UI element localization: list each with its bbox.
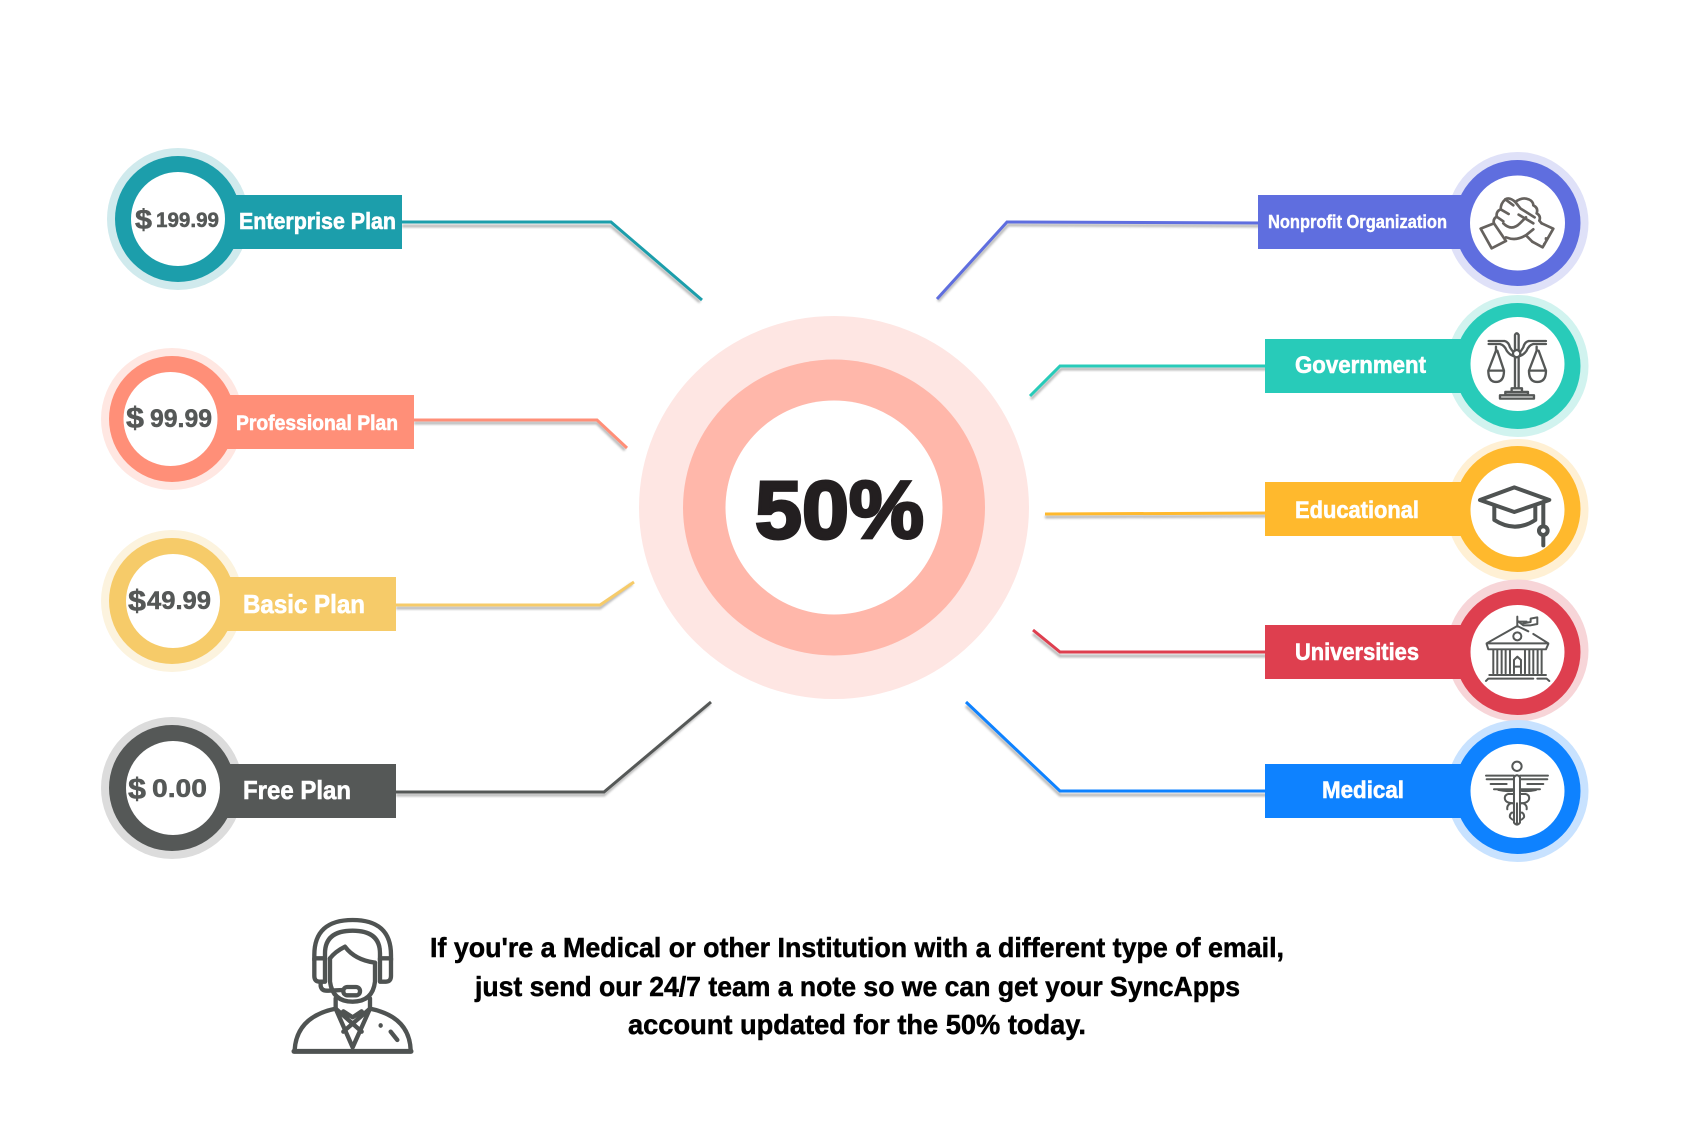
connector: Professional Plan: [414, 420, 627, 450]
label: Enterprise Plan: [239, 208, 396, 234]
panel: Nonprofit Organization: [1258, 152, 1588, 294]
price: $: [126, 402, 144, 435]
connector: Enterprise Plan: [402, 222, 702, 302]
connector: Universities: [1033, 630, 1270, 656]
panel: Universities: [1265, 580, 1588, 722]
callout text: just send our 24/7 team a note so we can get your SyncApps: [474, 971, 1240, 1002]
price: $: [128, 773, 146, 806]
label: Medical: [1322, 777, 1404, 804]
label: Educational: [1295, 497, 1419, 524]
price: [126, 402, 212, 435]
panel: Enterprise Plan: [107, 148, 402, 290]
central 50% ring: [639, 316, 1029, 699]
connector: Government: [1030, 366, 1270, 399]
price: [128, 773, 207, 806]
callout text: [430, 932, 1284, 1040]
icon: handshake: [1481, 198, 1553, 248]
label: Professional Plan: [236, 412, 398, 435]
price: 99.99: [150, 405, 212, 433]
connector: Basic Plan: [396, 582, 634, 608]
icon: graduation cap: [1480, 487, 1549, 545]
panel: Professional Plan: [101, 348, 414, 490]
price: $: [128, 585, 146, 618]
connector: Medical: [966, 702, 1270, 795]
price: 0.00: [152, 775, 207, 803]
panel: Government: [1265, 295, 1588, 437]
icon: scales of justice: [1488, 333, 1546, 399]
panel: Basic Plan: [101, 530, 396, 672]
icon: caduceus: [1486, 762, 1548, 825]
callout text: If you're a Medical or other Institution with a different type of email,: [430, 932, 1284, 963]
price: [128, 585, 211, 618]
connector: Nonprofit Organization: [937, 222, 1264, 301]
panel: Educational: [1265, 439, 1588, 581]
panel: Medical: [1265, 720, 1588, 862]
price: 199.99: [156, 209, 219, 232]
label: Basic Plan: [243, 589, 365, 619]
connector: Educational: [1045, 513, 1270, 517]
label: Universities: [1295, 639, 1419, 666]
panel: Free Plan: [101, 717, 396, 859]
icon: university building: [1486, 617, 1549, 681]
price: [135, 204, 219, 235]
label: Nonprofit Organization: [1268, 212, 1447, 232]
label: Free Plan: [243, 775, 351, 805]
price: 49.99: [147, 587, 211, 615]
connector: Free Plan: [396, 702, 711, 795]
label: Government: [1295, 352, 1426, 379]
price: $: [135, 204, 152, 235]
icon: support agent with headset: [294, 920, 411, 1051]
callout text: account updated for the 50% today.: [628, 1009, 1086, 1040]
50% figure: 50%: [755, 465, 924, 556]
